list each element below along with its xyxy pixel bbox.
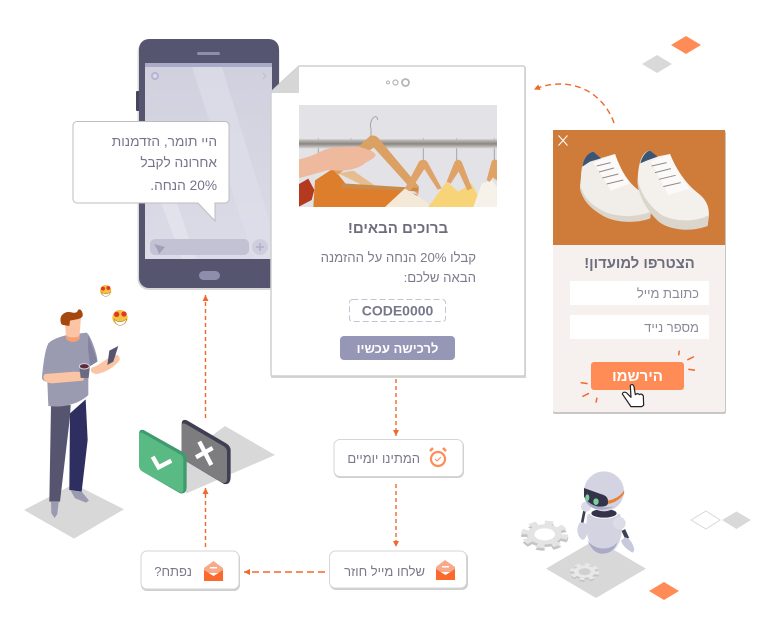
decision tiles bbox=[139, 420, 275, 494]
flow box: waited two days bbox=[334, 440, 464, 478]
robot with gears bbox=[525, 471, 646, 598]
icon: decorative orange diamond top bbox=[671, 36, 701, 54]
arrow: popup to card bbox=[534, 84, 614, 123]
other sweaters bbox=[385, 188, 430, 207]
popup heading: הצטרפו למועדון! bbox=[584, 255, 695, 272]
input: email bbox=[570, 281, 709, 305]
head bbox=[65, 317, 81, 342]
button: buy now: לרכישה עכשיו bbox=[357, 341, 438, 356]
robot body bbox=[577, 471, 634, 554]
torso bbox=[42, 333, 97, 407]
phone bbox=[136, 39, 280, 290]
icon: hand cursor bbox=[622, 385, 644, 407]
card heading: ברוכים הבאים! bbox=[348, 220, 449, 237]
small hangers bbox=[405, 160, 442, 191]
speech bubble: היי תומר, הזדמנות bbox=[112, 134, 217, 149]
input: phone: מספר נייד bbox=[644, 320, 699, 335]
emoji bbox=[100, 285, 128, 325]
legs bbox=[69, 399, 88, 492]
arrow: decision to phone bbox=[204, 295, 206, 418]
platform bbox=[24, 484, 124, 539]
large gear bbox=[525, 523, 565, 549]
flow box: opened: נפתח? bbox=[154, 564, 192, 579]
panel: welcome email card bbox=[271, 66, 526, 378]
input: email: כתובת מייל bbox=[637, 286, 699, 301]
fold corner bbox=[272, 66, 299, 93]
arrow: opened to decision bbox=[204, 488, 206, 547]
speech bubble bbox=[73, 122, 229, 221]
panel: signup popup bbox=[553, 130, 726, 414]
background hanger bbox=[338, 171, 375, 186]
hand bbox=[299, 147, 376, 178]
flow box: send return mail bbox=[330, 551, 468, 590]
icon: decorative orange diamond bottom bbox=[649, 582, 679, 600]
speech bubble: אחרונה לקבל bbox=[140, 155, 217, 170]
icon: close bbox=[558, 136, 568, 146]
coupon code: CODE0000 bbox=[362, 302, 434, 318]
icon: decorative outline diamond bbox=[691, 511, 720, 529]
red sweater bbox=[299, 179, 314, 207]
gray x tile bbox=[182, 420, 231, 484]
arms bbox=[43, 372, 85, 383]
arrow: card to wait bbox=[395, 379, 397, 436]
main hanger bbox=[333, 135, 419, 195]
flow box: waited two days: המתינו יומיים bbox=[347, 451, 420, 466]
person with phone bbox=[24, 285, 128, 539]
button: buy now bbox=[340, 336, 455, 360]
icon: decorative gray diamond top bbox=[642, 55, 672, 73]
arrow: wait to send bbox=[395, 484, 397, 547]
button: sign up bbox=[591, 362, 684, 390]
card body text: קבלו 20% הנחה על ההזמנה bbox=[321, 250, 476, 265]
arrow: send to opened bbox=[244, 571, 325, 573]
button: sign up: הירשמו bbox=[612, 368, 663, 385]
cup bbox=[79, 365, 90, 378]
click sparks bbox=[581, 351, 695, 403]
right shoe bbox=[638, 151, 709, 229]
input: phone bbox=[570, 315, 709, 339]
dots bbox=[386, 79, 409, 86]
card body text bbox=[321, 250, 476, 285]
speech bubble: 20% הנחה. bbox=[150, 178, 217, 193]
platform bbox=[546, 539, 646, 598]
card body text: הבאה שלכם: bbox=[404, 270, 476, 285]
green check tile bbox=[139, 430, 187, 494]
flow box: opened bbox=[141, 551, 240, 591]
photo: clothes hangers bbox=[299, 105, 497, 207]
left shoe bbox=[580, 152, 651, 221]
coupon code bbox=[350, 300, 446, 322]
icon: decorative gray diamond right bbox=[722, 512, 751, 529]
handheld phone bbox=[107, 346, 118, 365]
flow box: send return mail: שלחו מייל חוזר bbox=[344, 564, 425, 579]
photo: white sneakers bbox=[553, 130, 725, 245]
orange sweater bbox=[313, 168, 418, 207]
small gear bbox=[572, 565, 597, 580]
